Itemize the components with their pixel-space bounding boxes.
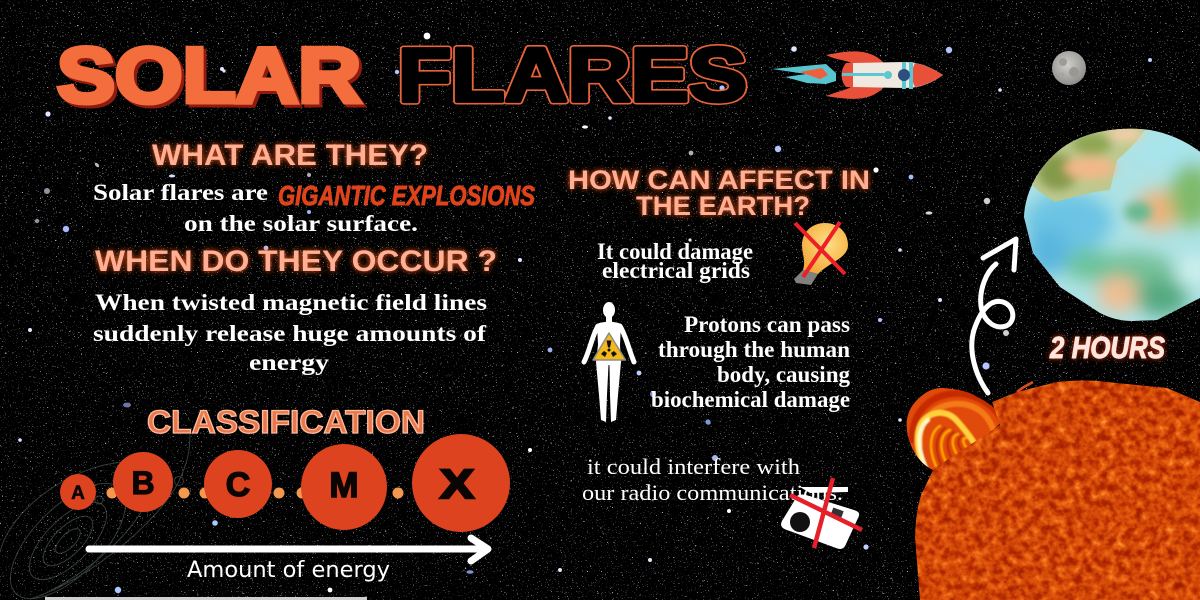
class B	[113, 452, 173, 512]
panel: when do they occur	[93, 245, 497, 375]
text: cause: When twisted magnetic field lines	[95, 290, 487, 315]
title word: SOLAR: SOLAR	[60, 34, 364, 122]
class X: X	[440, 461, 474, 507]
text: radio	[582, 454, 843, 505]
text: cause: suddenly release huge amounts of	[93, 321, 486, 346]
text: cause: energy	[249, 350, 330, 375]
class A: A	[71, 483, 85, 504]
text: protons: through the human	[658, 337, 850, 362]
arrow: sun to earth squiggle	[972, 239, 1016, 393]
text: protons	[651, 312, 850, 412]
text: protons: body, causing	[717, 362, 850, 387]
class A	[60, 474, 96, 510]
class M: M	[329, 466, 359, 505]
class M	[301, 444, 387, 530]
sun disc	[915, 380, 1200, 600]
text: protons: biochemical damage	[651, 387, 850, 412]
text: electrical grids: electrical grids	[602, 258, 750, 283]
class B: B	[131, 465, 155, 501]
title: SOLAR FLARES	[57, 31, 747, 122]
text: definition: GIGANTIC EXPLOSIONS	[278, 180, 535, 211]
class C	[204, 450, 272, 518]
connecting dots	[106, 488, 404, 498]
rocket fins	[826, 51, 884, 63]
illustration: sun	[900, 380, 1200, 600]
icon: crossed-out radio	[781, 478, 862, 549]
title word: SOLAR: SOLAR	[57, 31, 361, 119]
illustration: earth	[1020, 122, 1200, 325]
text: radio: our radio communications.	[582, 480, 843, 505]
text: definition: on the solar surface.	[184, 211, 418, 236]
solar flare loop	[906, 388, 1000, 470]
panel: what are they	[93, 139, 535, 236]
decorative: bottom edge line	[45, 597, 367, 600]
heading: how can affect in the earth: THE EARTH?	[636, 191, 810, 221]
icon: rocket	[772, 51, 943, 99]
label: amount of energy: Amount of energy	[187, 558, 390, 583]
text: radio: it could interfere with	[587, 454, 800, 479]
class X	[412, 434, 510, 532]
icon: moon	[1052, 51, 1086, 85]
panel: how can affect the earth	[568, 165, 870, 549]
heading: what are they: WHAT ARE THEY?	[152, 139, 428, 172]
panel: classification	[60, 404, 510, 583]
text: definition	[93, 180, 535, 236]
icon: human body with radiation sign	[584, 302, 634, 422]
text: definition: Solar flares are	[93, 180, 268, 205]
rocket flame	[772, 64, 836, 84]
class C: C	[226, 466, 250, 504]
heading: classification: CLASSIFICATION	[147, 404, 425, 440]
heading: how can affect in the earth	[568, 165, 870, 221]
text: cause	[93, 290, 487, 375]
heading: how can affect in the earth: HOW CAN AFFECT IN	[568, 165, 870, 195]
text: protons: Protons can pass	[684, 312, 850, 337]
decorative illustration: orbit rings	[0, 433, 190, 600]
arrow: energy axis	[89, 538, 488, 561]
title word: FLARES: FLARES	[398, 33, 747, 118]
label: 2 hours: 2 HOURS	[1049, 330, 1165, 365]
rocket body	[853, 62, 943, 88]
heading: when do they occur: WHEN DO THEY OCCUR ?	[95, 245, 497, 278]
prominence	[1017, 382, 1033, 392]
icon: crossed-out light bulb	[794, 222, 848, 285]
title word: FLARES: FLARES	[398, 33, 747, 118]
text: electrical grids	[597, 239, 753, 283]
text: electrical grids: It could damage	[597, 239, 753, 264]
